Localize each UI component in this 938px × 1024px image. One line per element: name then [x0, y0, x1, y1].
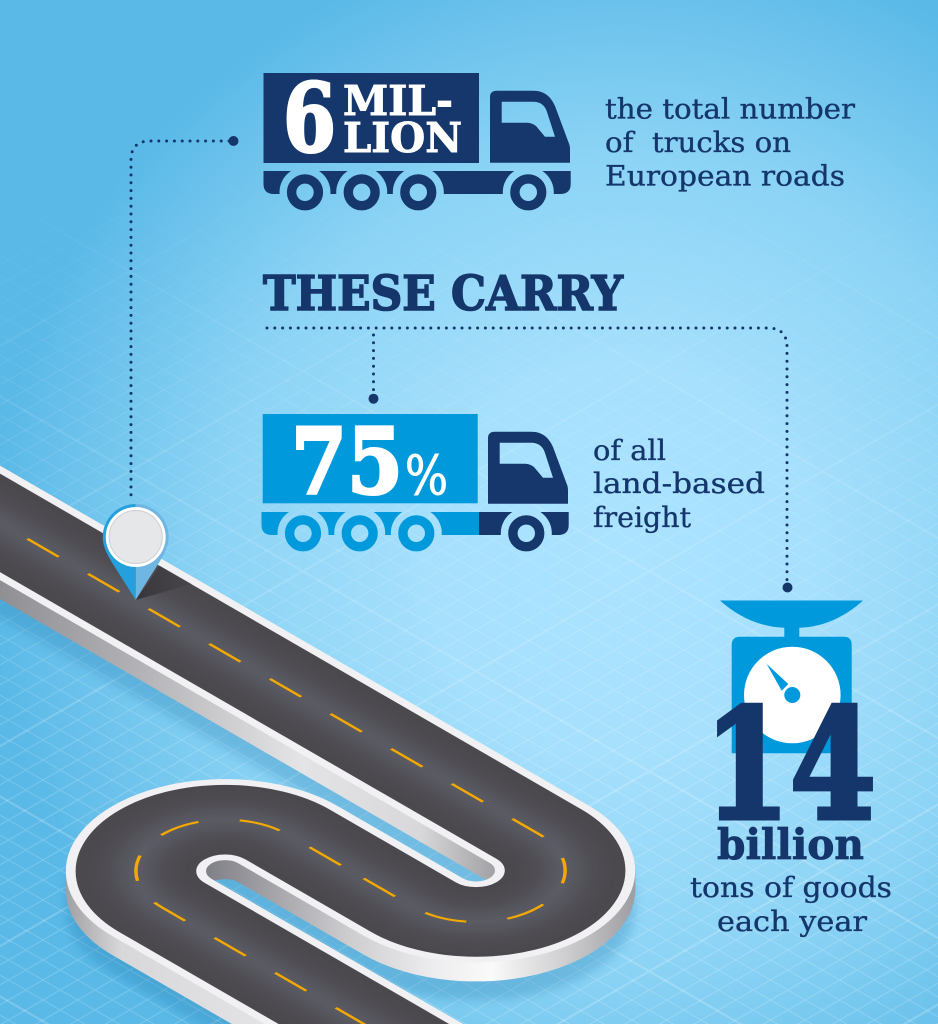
figure: 14 billion [690, 675, 892, 938]
truck figure: LION [343, 114, 462, 162]
road asphalt [0, 469, 730, 1024]
text: total number of trucks: of trucks on [605, 126, 791, 159]
truck cab [488, 432, 568, 504]
road curb [0, 469, 730, 1024]
truck: 75 percent [262, 409, 569, 547]
text: total number of trucks: the total number [605, 92, 856, 126]
truck wheels [292, 179, 542, 206]
text: land-based freight: freight [593, 501, 692, 534]
road centre dashes [0, 469, 730, 1024]
truck box [263, 414, 478, 503]
truck figure [283, 63, 462, 174]
truck: 6 million [264, 63, 571, 206]
text: land-based freight [593, 434, 765, 534]
truck figure: MIL- [343, 77, 453, 125]
connector: 6 million to pin [131, 136, 238, 500]
truck chassis [262, 512, 569, 535]
text: land-based freight: of all [593, 434, 666, 467]
figure: 14 billion: 14 [704, 675, 876, 854]
road [0, 466, 639, 1024]
truck box [264, 73, 479, 163]
icon: map pin [103, 504, 192, 600]
truck chassis [264, 171, 571, 194]
truck figure: 6 [283, 63, 336, 174]
truck cab [490, 91, 570, 163]
road side wall [0, 466, 636, 1024]
icon: weighing scale [720, 600, 863, 753]
connector: these carry [267, 328, 792, 592]
text: total number of trucks: European roads [605, 160, 845, 192]
figure: 14 billion: each year [717, 905, 868, 938]
truck wheels [290, 520, 540, 547]
truck figure: % [405, 444, 448, 507]
figure: 14 billion: billion [717, 820, 864, 869]
truck figure: 75 [291, 409, 403, 515]
figure: 14 billion: tons of goods [690, 871, 892, 904]
text: total number of trucks [605, 92, 856, 192]
heading: these carry: THESE CARRY [263, 266, 624, 322]
text: land-based freight: land-based [593, 467, 765, 500]
